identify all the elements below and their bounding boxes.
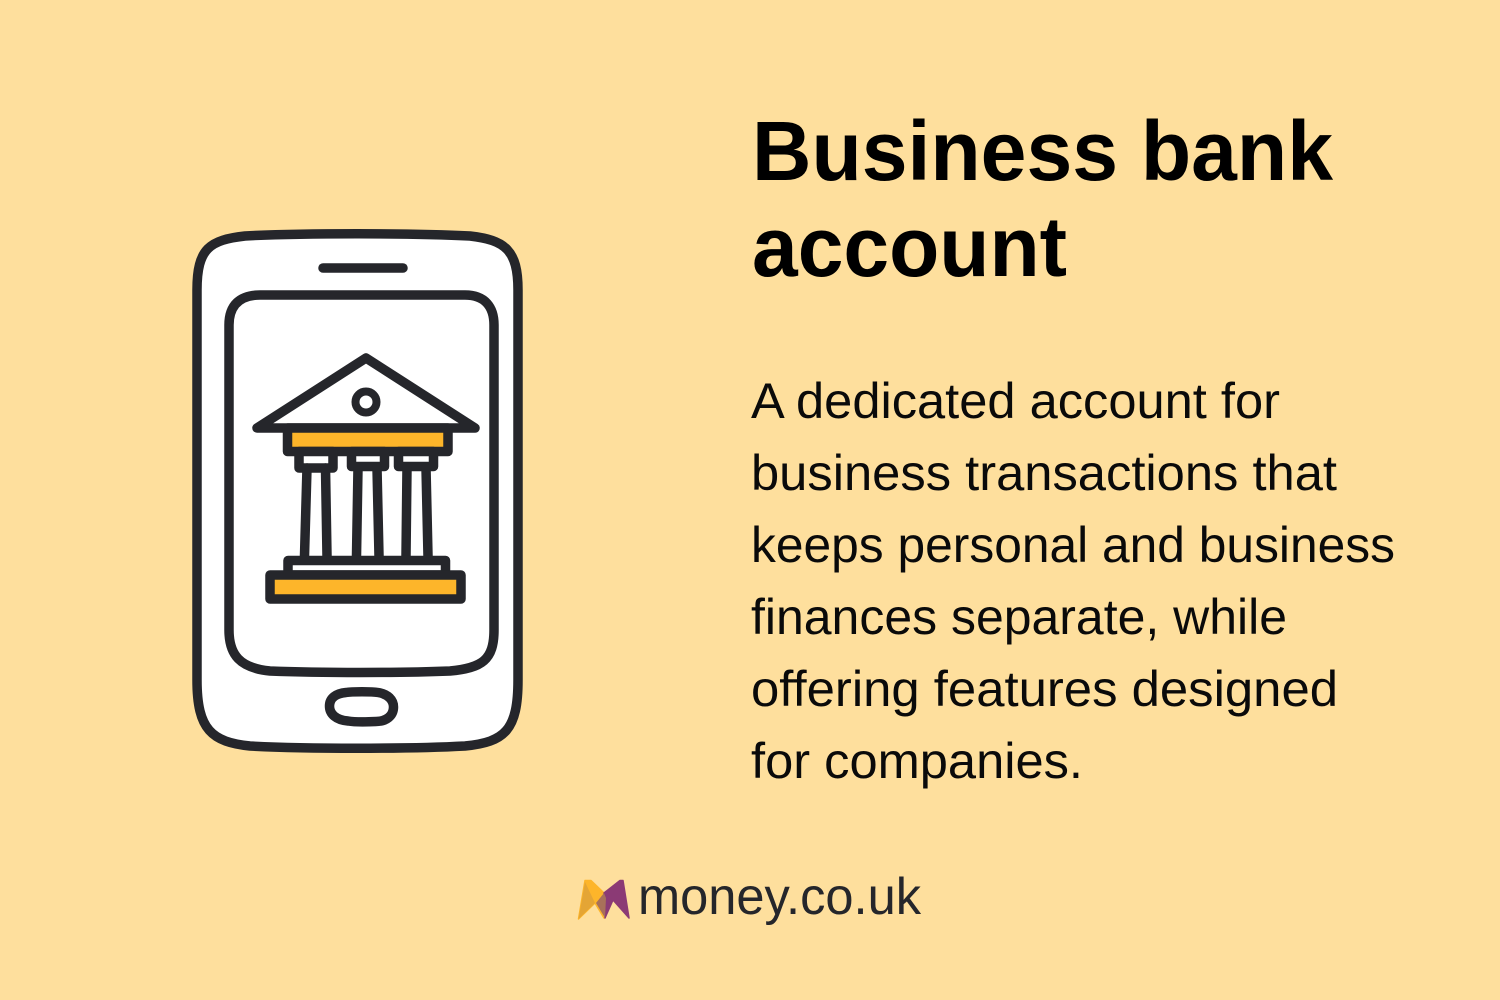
- roof: [257, 358, 475, 428]
- speaker slot: [323, 263, 403, 273]
- description text: [751, 373, 1395, 789]
- description text: business transactions that: [751, 445, 1337, 501]
- description text: keeps personal and business: [751, 517, 1395, 573]
- icon: phone with bank: [197, 234, 518, 748]
- description text: finances separate, while: [751, 589, 1287, 645]
- description text: offering features designed: [751, 661, 1338, 717]
- column capitals: [299, 452, 434, 468]
- columns: [304, 468, 428, 556]
- logo mark: [578, 880, 629, 919]
- home button: [330, 692, 394, 722]
- title: Business bank: [752, 104, 1333, 198]
- description text: A dedicated account for: [751, 373, 1280, 429]
- upper plinth: [288, 560, 446, 575]
- description text: for companies.: [751, 733, 1083, 789]
- title: [752, 104, 1333, 294]
- logo: money.co.uk: [578, 868, 922, 926]
- entablature: [288, 428, 448, 452]
- icon: bank building: [257, 358, 475, 599]
- phone screen: [229, 295, 494, 672]
- logo wordmark: money.co.uk: [638, 868, 922, 926]
- title: account: [752, 200, 1067, 294]
- roof circle: [356, 392, 376, 412]
- phone body: [197, 234, 518, 748]
- base: [270, 575, 461, 599]
